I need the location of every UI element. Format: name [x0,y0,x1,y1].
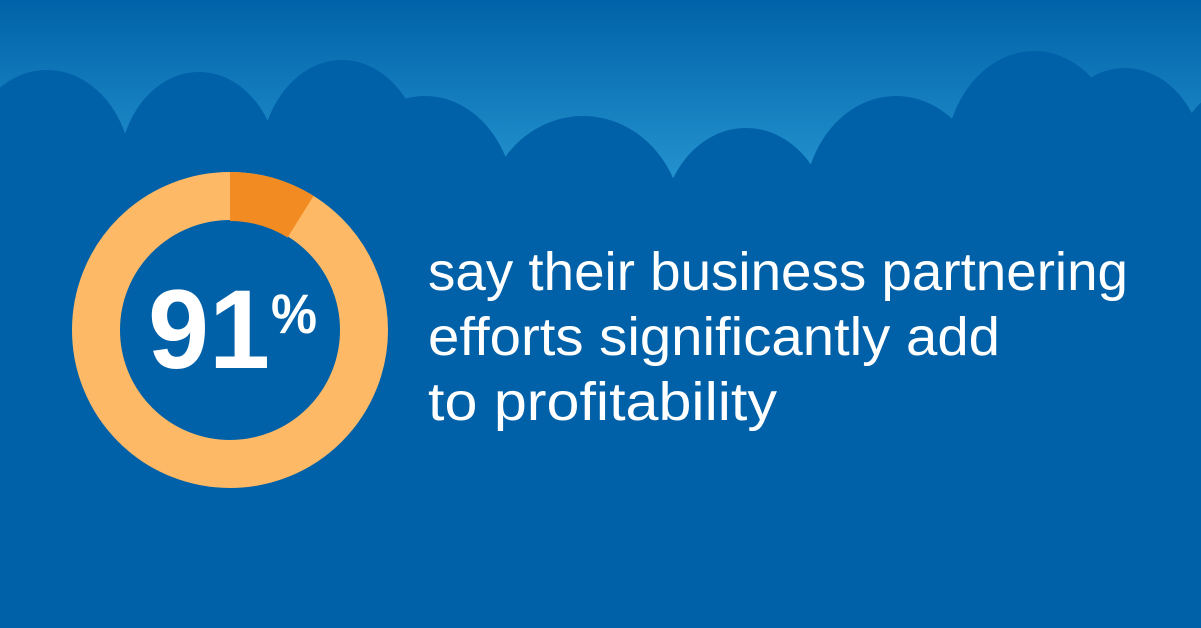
big number 91%: 91 [148,267,270,392]
statement text: efforts significantly add [428,307,1000,367]
donut chart: 91% [96,172,364,464]
statement text [428,242,1128,432]
statement text: say their business partnering [428,242,1128,302]
big number 91%: % [271,282,317,345]
sky background [0,0,1201,200]
statement text: to profitability [428,372,777,432]
